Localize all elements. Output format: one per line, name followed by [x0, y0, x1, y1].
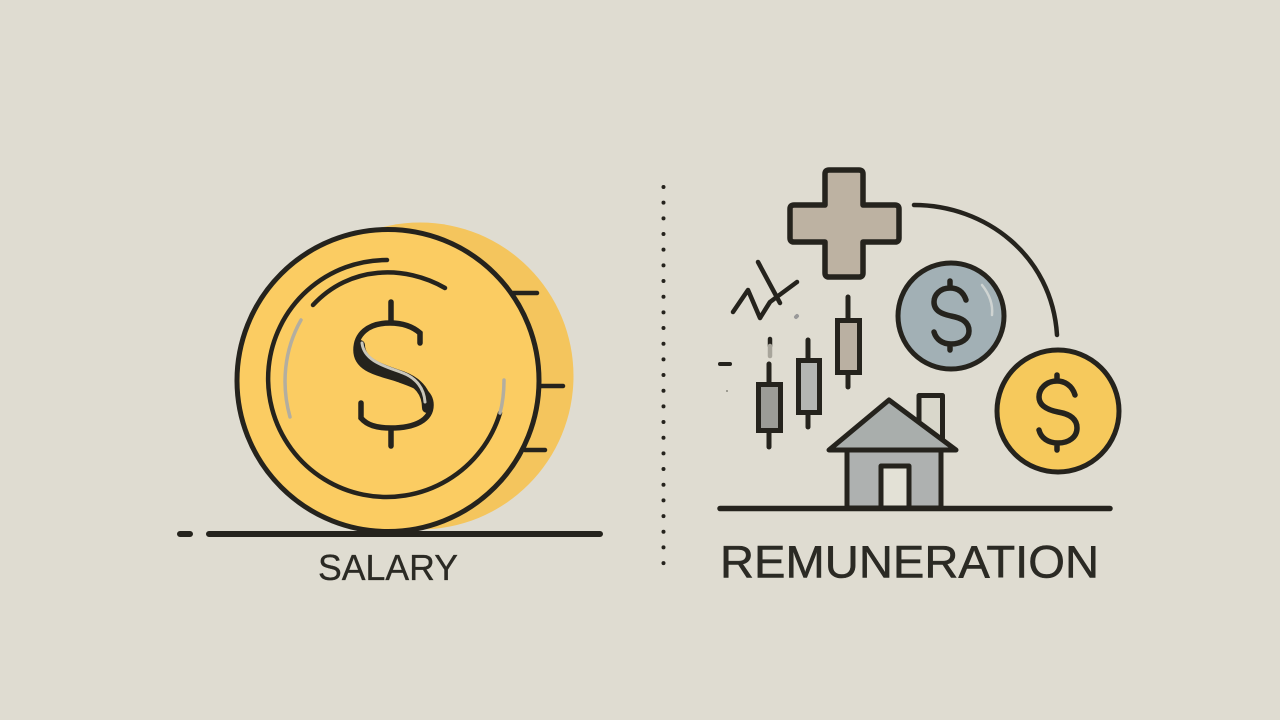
- icon: yellow dollar coin: [997, 350, 1119, 472]
- icon: medical cross: [790, 170, 899, 277]
- candle 1: [758, 339, 780, 447]
- icon: candlestick chart: [758, 297, 860, 447]
- icon: grey dollar coin: [898, 263, 1004, 369]
- salary baseline: [180, 531, 600, 537]
- dotted divider: [662, 187, 666, 564]
- heading: salary: SALARY: [318, 547, 458, 588]
- remuneration baseline: [720, 506, 1110, 511]
- icon: zigzag scribble: [720, 262, 797, 392]
- icon: house: [829, 396, 956, 508]
- heading: remuneration: REMUNERATION: [720, 536, 1099, 588]
- icon: dollar sign on salary coin: [356, 302, 431, 446]
- icon: salary coin: [237, 222, 574, 532]
- connecting arc arrow: [914, 205, 1057, 335]
- candle 2: [798, 340, 820, 427]
- candle 3: [838, 297, 860, 387]
